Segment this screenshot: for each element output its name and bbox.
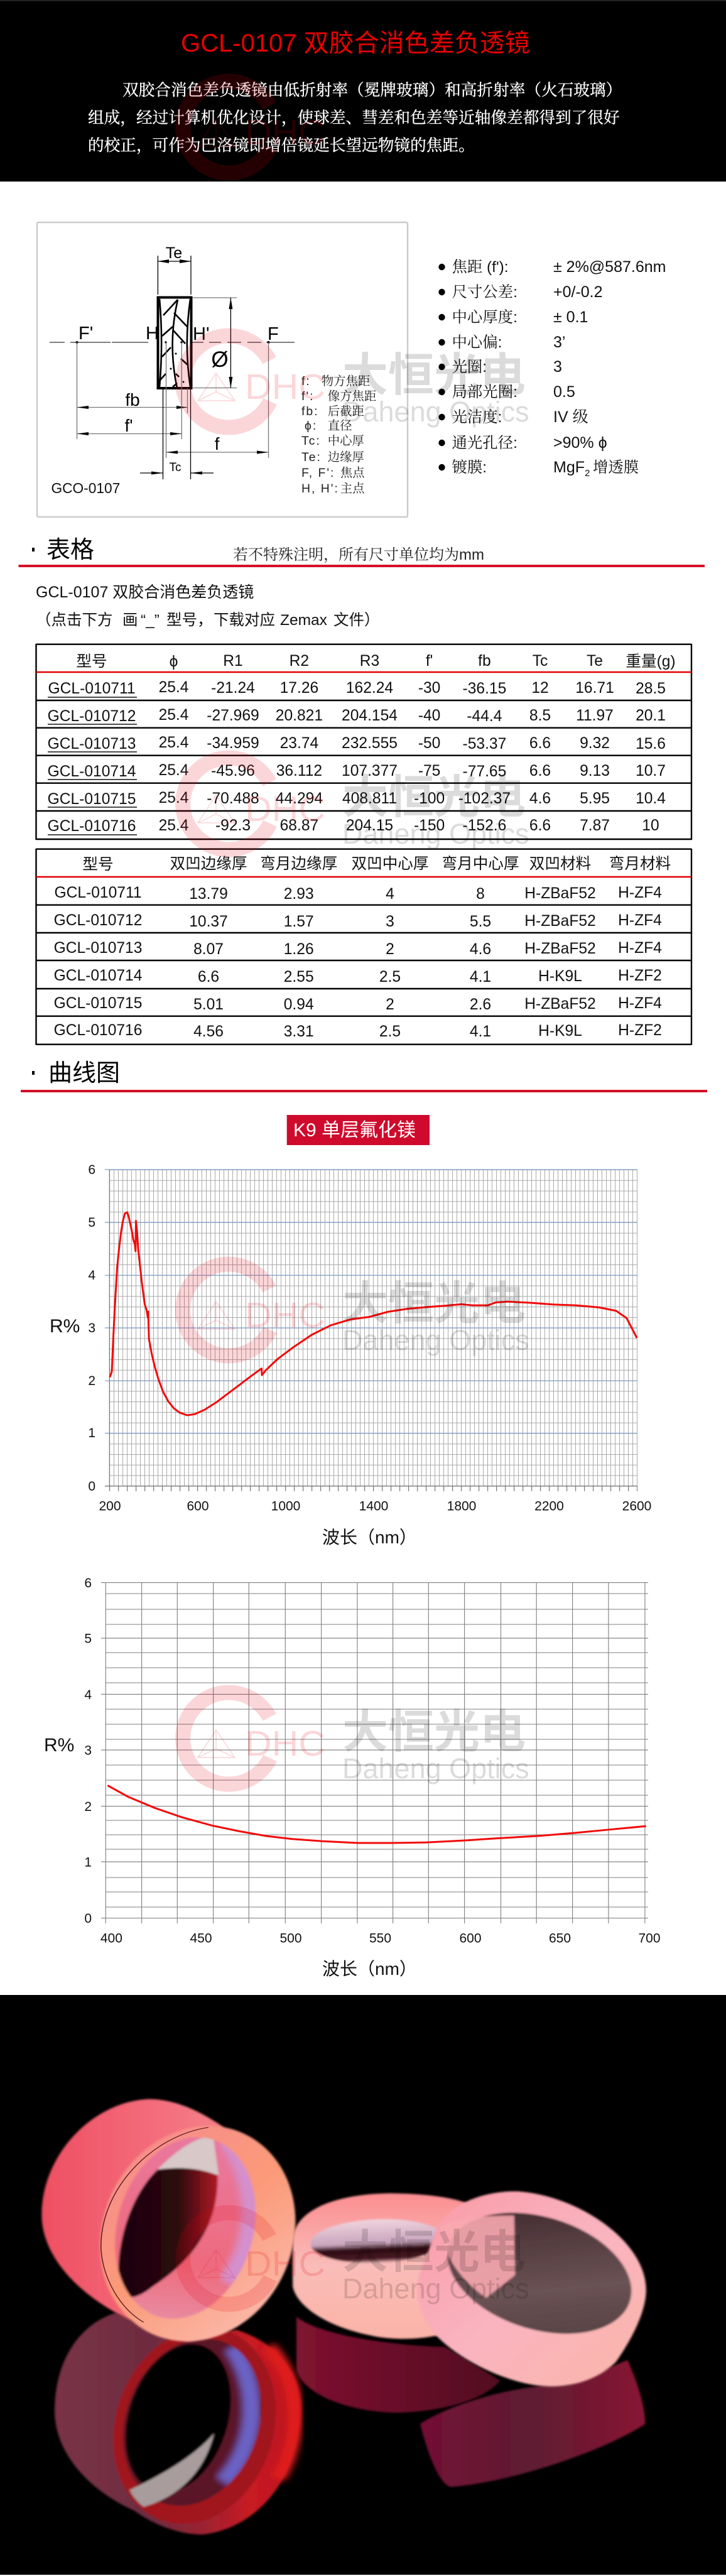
- watermark: chart 2: 大恒光电: [342, 1707, 526, 1758]
- table 2: element details: 2: [386, 996, 394, 1013]
- spec list: 焦距 (f'):: [452, 259, 509, 276]
- table 2: element details: 3: [386, 913, 394, 930]
- diagram legend: 焦点: [340, 466, 365, 480]
- spec list: MgF: [553, 459, 585, 476]
- x axis labels: [99, 1499, 651, 1514]
- watermark: diagram: Daheng Optics: [342, 396, 529, 428]
- table 1: dimensions: GCL-010711: [48, 680, 136, 697]
- spec list: 中心偏:: [452, 334, 502, 351]
- table 1: dimensions: 9.32: [580, 735, 610, 752]
- table caption: [36, 584, 379, 629]
- table 2: element details: GCL-010712: [54, 912, 142, 929]
- table 1: dimensions: 44.294: [276, 790, 323, 807]
- dimension diameter: Ø: [211, 347, 229, 372]
- table 1: dimensions: GCL-010713: [48, 736, 136, 753]
- header banner: [0, 0, 726, 182]
- table 2: element details: 弯月材料: [609, 855, 671, 872]
- table 2: element details: 双凹材料: [529, 855, 591, 872]
- y axis labels: 2: [84, 1800, 92, 1814]
- spec list: 0.5: [553, 383, 575, 401]
- table 1: dimensions: -100: [414, 790, 445, 807]
- y axis labels: 4: [88, 1268, 95, 1283]
- table caption: 文件）: [333, 611, 379, 629]
- x axis labels: 550: [369, 1931, 391, 1946]
- table 1: dimensions: Te: [587, 653, 603, 670]
- point labels: H: [146, 323, 159, 344]
- reflectance curve: [107, 1785, 646, 1843]
- table caption: GCL-0107 双胶合消色差负透镜: [36, 584, 254, 601]
- table 1: dimensions: 5.95: [580, 790, 610, 807]
- x axis labels: 2200: [534, 1499, 564, 1514]
- x axis labels: 400: [100, 1931, 122, 1946]
- x axis labels: 1800: [447, 1499, 476, 1514]
- table 1: dimensions: 9.13: [580, 763, 610, 780]
- table 1: dimensions: 20.821: [276, 707, 323, 724]
- chart 2: reflectance 400-700 nm: [44, 1576, 661, 1979]
- y axis labels: 3: [88, 1321, 95, 1335]
- panel: lens diagram: [37, 222, 408, 517]
- table 1: dimensions: -36.15: [463, 680, 506, 697]
- table 1: dimensions: 17.26: [280, 680, 318, 697]
- watermark: chart 2: Daheng Optics: [342, 1753, 529, 1785]
- table 2: element details: H-ZBaF52: [524, 913, 596, 930]
- table 2: element details: 4: [386, 886, 394, 903]
- table 1: dimensions: 11.97: [576, 707, 614, 724]
- y axis labels: [88, 1163, 95, 1494]
- x axis labels: 450: [190, 1931, 212, 1946]
- table 1: dimensions: -40: [418, 707, 440, 724]
- table 1: dimensions: 28.5: [636, 680, 666, 697]
- dimension f': [77, 342, 182, 439]
- x axis labels: 600: [459, 1931, 482, 1946]
- table 1: dimensions: -70.488: [207, 790, 259, 807]
- diagram legend: 物方焦距: [322, 374, 370, 388]
- table 2: element details: H-ZF2: [618, 967, 662, 984]
- table 1: dimensions: 408.811: [342, 790, 397, 807]
- table 1: dimensions: -152.6: [463, 817, 506, 834]
- table 2: element details: 8.07: [193, 941, 224, 958]
- table 1: dimensions: 162.24: [346, 680, 393, 697]
- spec list: 2: [585, 468, 590, 479]
- table 1: dimensions: 20.1: [636, 707, 666, 724]
- table 1: dimensions: -45.96: [211, 763, 255, 780]
- section heading: curves: [21, 1060, 707, 1092]
- chart label: K9 single layer MgF2: K9 单层氟化镁: [293, 1120, 416, 1141]
- middle lens: [293, 2193, 468, 2339]
- spec list: [438, 258, 666, 479]
- y axis labels: 1: [84, 1856, 92, 1869]
- table 2: element details: 2.5: [379, 969, 401, 986]
- y axis labels: 6: [88, 1163, 95, 1177]
- diagram legend: 像方焦距: [328, 389, 376, 403]
- table 1: dimensions: -30: [418, 680, 440, 697]
- table 2: element details: 4.6: [470, 941, 491, 958]
- axis titles: 波长（nm）: [322, 1528, 417, 1547]
- x axis labels: 600: [187, 1499, 209, 1514]
- section heading: curves: 曲线图: [48, 1060, 120, 1087]
- spec list: ± 0.1: [553, 308, 588, 326]
- intro paragraph: 双胶合消色差负透镜由低折射率（冕牌玻璃）和高折射率（火石玻璃）: [122, 81, 622, 99]
- table 2: element details: H-ZF4: [618, 912, 662, 929]
- table 2: element details: 弯月中心厚: [442, 855, 519, 872]
- table 1: dimensions: f': [426, 653, 433, 670]
- table 1: dimensions: 25.4: [159, 679, 188, 696]
- spec list: 光圈:: [452, 359, 487, 376]
- table 2: element details: H-ZBaF52: [524, 996, 596, 1013]
- table 1: dimensions: 重量(g): [626, 653, 676, 670]
- dimension fb: [77, 342, 187, 439]
- table 2: element details: [36, 849, 691, 1045]
- watermark: photo: 大恒光电: [342, 2227, 526, 2278]
- table 1: dimensions: 7.87: [580, 817, 610, 834]
- reflection: middle lens: [296, 2317, 501, 2413]
- table 1: dimensions: 6.6: [529, 817, 551, 834]
- grid: [101, 1582, 648, 1923]
- y axis labels: [84, 1576, 92, 1926]
- spec list: 局部光圈:: [452, 384, 517, 401]
- watermark: header: DHC: [245, 112, 325, 153]
- table 2: element details: 5.01: [193, 996, 224, 1013]
- watermark: diagram: DHC: [245, 367, 325, 407]
- x axis labels: [100, 1931, 661, 1946]
- diagram legend: 后截距: [328, 405, 364, 418]
- dimension Te: [158, 244, 191, 295]
- table 2: element details: 弯月边缘厚: [260, 855, 337, 872]
- watermark: photo: DHC: [245, 2244, 325, 2284]
- watermark: diagram: 大恒光电: [342, 350, 526, 401]
- table 2: element details: 0.94: [284, 996, 314, 1013]
- table 1: dimensions: [36, 644, 691, 840]
- table 2: element details: 双凹中心厚: [352, 855, 428, 872]
- x axis labels: 1400: [359, 1499, 388, 1514]
- table 2: element details: 5.5: [470, 913, 491, 930]
- spec list: 镀膜:: [452, 459, 487, 476]
- table 2: element details: H-ZBaF52: [524, 885, 596, 902]
- watermark: chart 1: DHC: [245, 1295, 325, 1335]
- table 1: dimensions: ϕ: [170, 653, 178, 670]
- axis titles: R%: [44, 1735, 74, 1756]
- bullets: [438, 264, 445, 470]
- table 2: element details: H-ZF2: [618, 1022, 662, 1039]
- spec list: 通光孔径:: [452, 435, 517, 452]
- table 2: element details: 1.26: [284, 941, 314, 958]
- unit note: 若不特殊注明，所有尺寸单位均为mm: [233, 546, 484, 563]
- spec list: 中心厚度:: [452, 309, 517, 326]
- right lens: [418, 2188, 657, 2386]
- table 1: dimensions: 4.6: [529, 790, 551, 807]
- table 1: dimensions: -75: [418, 763, 440, 780]
- intro paragraph: 的校正，可作为巴洛镜即增倍镜延长望远物镜的焦距。: [88, 136, 475, 155]
- point labels: [79, 323, 279, 344]
- diagram legend: H, H':: [301, 482, 339, 496]
- table 2: element details: 10.37: [189, 913, 228, 930]
- reflectance curve: [110, 1212, 637, 1415]
- diagram legend: 中心厚: [328, 434, 364, 448]
- table 1: dimensions: R3: [360, 653, 379, 670]
- x axis labels: 500: [279, 1931, 302, 1946]
- table 1: dimensions: 10: [642, 817, 659, 834]
- table 1: dimensions: R2: [290, 653, 309, 670]
- table 1: dimensions: 10.7: [636, 763, 666, 780]
- diagram legend: fb:: [301, 405, 319, 418]
- left lens seam: [101, 2128, 209, 2322]
- table 1: dimensions: -77.65: [463, 763, 506, 780]
- table 2: element details: GCL-010713: [54, 940, 142, 957]
- diagram legend: ϕ:: [305, 419, 317, 433]
- watermark: photo: [183, 2213, 529, 2305]
- table 1: dimensions: GCL-010716: [48, 818, 136, 835]
- x axis labels: 200: [99, 1499, 121, 1514]
- spec list: 3’: [553, 334, 565, 351]
- table caption: （点击下方: [36, 611, 113, 629]
- watermark: table: DHC: [245, 789, 325, 829]
- diagram legend: Tc:: [301, 434, 321, 448]
- lens cross-section: [158, 298, 191, 388]
- title: GCL-0107 双胶合消色差负透镜: [181, 30, 530, 57]
- y axis labels: 1: [88, 1426, 95, 1440]
- table 2: element details: 2.55: [284, 969, 314, 986]
- y axis labels: 3: [84, 1744, 92, 1758]
- table 2: element details: GCL-010716: [54, 1022, 142, 1039]
- part number: GCO-0107: [51, 480, 120, 496]
- table 1: dimensions: Tc: [533, 653, 548, 670]
- table 1: dimensions: 6.6: [529, 763, 551, 780]
- axis titles: [44, 1735, 417, 1979]
- table 2: element details: 13.79: [189, 886, 228, 903]
- table 2: element details: 4.1: [470, 1023, 491, 1040]
- table 1: dimensions: -27.969: [207, 707, 259, 724]
- table 1: dimensions: GCL-010712: [48, 708, 136, 725]
- table 1: dimensions: 36.112: [276, 763, 322, 780]
- x axis labels: 650: [549, 1931, 571, 1946]
- table 1: dimensions: GCL-010714: [48, 763, 136, 780]
- table 1: dimensions: 107.377: [342, 763, 398, 780]
- table 1: dimensions: 16.71: [575, 680, 614, 697]
- table 1: dimensions: 6.6: [529, 735, 551, 752]
- chart 1: reflectance 200-2600 nm: [50, 1163, 651, 1547]
- table 2: element details: 2.6: [470, 996, 491, 1013]
- table 1: dimensions: 8.5: [529, 707, 551, 724]
- watermark: chart 2: [183, 1693, 529, 1785]
- table caption: 画: [122, 612, 138, 629]
- table 2: element details: H-K9L: [538, 968, 582, 985]
- table 1: dimensions: -50: [418, 735, 440, 752]
- optical axis: [50, 342, 295, 343]
- table 1: dimensions: 25.4: [159, 707, 188, 724]
- diagram legend: 主点: [340, 482, 365, 496]
- point labels: F': [79, 323, 93, 344]
- x axis labels: 2600: [622, 1499, 651, 1514]
- y axis labels: 0: [84, 1911, 92, 1926]
- spec list: +0/-0.2: [553, 283, 603, 301]
- watermark: chart 1: Daheng Optics: [342, 1324, 529, 1356]
- grid: [105, 1170, 637, 1491]
- y axis labels: 2: [88, 1374, 95, 1388]
- spec list: 3: [553, 358, 562, 376]
- table 1: dimensions: 232.555: [342, 735, 398, 752]
- left lens: [41, 2099, 316, 2354]
- section heading: table: [19, 537, 705, 567]
- dimension fb: fb: [125, 390, 140, 410]
- y axis labels: 5: [84, 1632, 92, 1646]
- table 1: dimensions: fb: [478, 653, 491, 670]
- table 2: element details: 8: [476, 886, 485, 903]
- diagram legend: f:: [301, 374, 311, 388]
- table 1: dimensions: -92.3: [215, 817, 251, 834]
- dimension f': f': [124, 416, 133, 435]
- table 1: dimensions: 12: [531, 680, 549, 697]
- table 2: element details: 2.93: [284, 886, 314, 903]
- axis titles: 波长（nm）: [322, 1959, 417, 1979]
- table 1: dimensions: 204.154: [342, 707, 398, 724]
- watermark: photo: Daheng Optics: [342, 2273, 529, 2305]
- intro paragraph: 组成，经过计算机优化设计，使球差、彗差和色差等近轴像差都得到了很好: [88, 109, 620, 127]
- table 1: dimensions: 23.74: [280, 735, 318, 752]
- table 1: dimensions: R1: [223, 653, 243, 670]
- table 1: dimensions: -150: [414, 817, 445, 834]
- diagram legend: 直径: [328, 419, 352, 433]
- table 2: element details: 双凹边缘厚: [170, 855, 247, 872]
- table 2: element details: H-ZF4: [618, 940, 662, 957]
- dimension f: f: [215, 434, 220, 454]
- dimension diameter: [193, 298, 237, 388]
- table 1: dimensions: -44.4: [467, 708, 502, 725]
- table 1: dimensions: 25.4: [159, 790, 188, 807]
- table 2: element details: 6.6: [198, 969, 219, 986]
- watermark: table: [183, 758, 529, 850]
- table 1: dimensions: 15.6: [636, 736, 666, 753]
- watermark: header: [183, 82, 325, 173]
- table 2: element details: 1.57: [284, 913, 314, 930]
- y axis labels: 6: [84, 1576, 92, 1590]
- diagram legend: Te:: [301, 450, 322, 464]
- axis titles: [50, 1316, 417, 1547]
- table 1: dimensions: -21.24: [211, 680, 255, 697]
- spec list: >90% ϕ: [553, 434, 607, 452]
- photo: lenses on black: [0, 1995, 726, 2575]
- spec list: ± 2%@587.6nm: [553, 258, 666, 276]
- diagram legend: 边缘厚: [328, 450, 364, 464]
- table 2: element details: 3.31: [284, 1023, 314, 1040]
- table 1: dimensions: 型号: [76, 653, 107, 670]
- table 2: element details: GCL-010715: [54, 995, 142, 1012]
- table 2: element details: 型号: [82, 856, 114, 873]
- table 1: dimensions: -102.37: [458, 790, 511, 807]
- y axis labels: 5: [88, 1215, 95, 1230]
- diagram legend: f':: [301, 389, 314, 403]
- watermark: table: Daheng Optics: [342, 818, 529, 850]
- table 1: dimensions: GCL-010715: [48, 791, 136, 808]
- table 2: element details: 4.56: [193, 1023, 224, 1040]
- table caption: 下载对应: [214, 611, 275, 629]
- table 2: element details: 2.5: [379, 1023, 401, 1040]
- table caption: “_”: [141, 612, 160, 629]
- x axis labels: 700: [638, 1931, 661, 1946]
- dimension f: [166, 342, 269, 458]
- table caption: Zemax: [280, 612, 327, 629]
- point labels: H': [193, 324, 209, 344]
- table 1: dimensions: 68.87: [280, 817, 318, 834]
- spec list: 尺寸公差:: [452, 284, 517, 301]
- diagram legend: F, F':: [301, 466, 335, 480]
- spec list: 光洁度:: [452, 409, 502, 426]
- table 2: element details: 4.1: [470, 969, 491, 986]
- watermark: chart 2: DHC: [245, 1724, 325, 1764]
- table 1: dimensions: -34.959: [207, 735, 259, 752]
- intro paragraph: [88, 81, 622, 155]
- dimension Tc: [140, 388, 214, 479]
- axis titles: R%: [50, 1316, 80, 1337]
- watermark: chart 1: [183, 1264, 529, 1356]
- point labels: F: [268, 324, 279, 344]
- watermark: table: 大恒光电: [342, 772, 526, 823]
- table 2: element details: GCL-010714: [54, 967, 142, 984]
- spec list: IV 级: [553, 408, 588, 426]
- table 2: element details: GCL-010711: [54, 884, 142, 901]
- table 2: element details: H-ZF4: [618, 884, 662, 901]
- table 1: dimensions: 25.4: [159, 734, 188, 751]
- y axis labels: 0: [88, 1479, 95, 1494]
- reflection: right lens: [420, 2360, 645, 2487]
- table 2: element details: H-K9L: [538, 1023, 582, 1040]
- table 2: element details: H-ZF4: [618, 995, 662, 1012]
- table 1: dimensions: -53.37: [463, 736, 506, 753]
- x axis labels: 1000: [271, 1499, 300, 1514]
- section heading: table: 表格: [46, 537, 94, 563]
- chart label: K9 single layer MgF2: [287, 1115, 430, 1145]
- dimension Tc: Tc: [170, 461, 181, 474]
- table 1: dimensions: 25.4: [159, 817, 188, 834]
- watermark: diagram: [183, 336, 529, 428]
- reflection: left lens: [55, 2313, 301, 2535]
- table 2: element details: 2: [386, 941, 394, 958]
- table 1: dimensions: 10.4: [636, 790, 666, 807]
- watermark: chart 1: 大恒光电: [342, 1278, 526, 1329]
- table 1: dimensions: 25.4: [159, 762, 188, 779]
- diagram legend: [301, 374, 376, 496]
- focal points: [75, 341, 270, 344]
- dimension Te: Te: [166, 244, 182, 262]
- spec list: 增透膜: [593, 459, 639, 476]
- table 1: dimensions: 204.15: [346, 817, 393, 834]
- table caption: 型号，: [166, 611, 212, 629]
- table 2: element details: H-ZBaF52: [524, 940, 596, 957]
- y axis labels: 4: [84, 1688, 92, 1702]
